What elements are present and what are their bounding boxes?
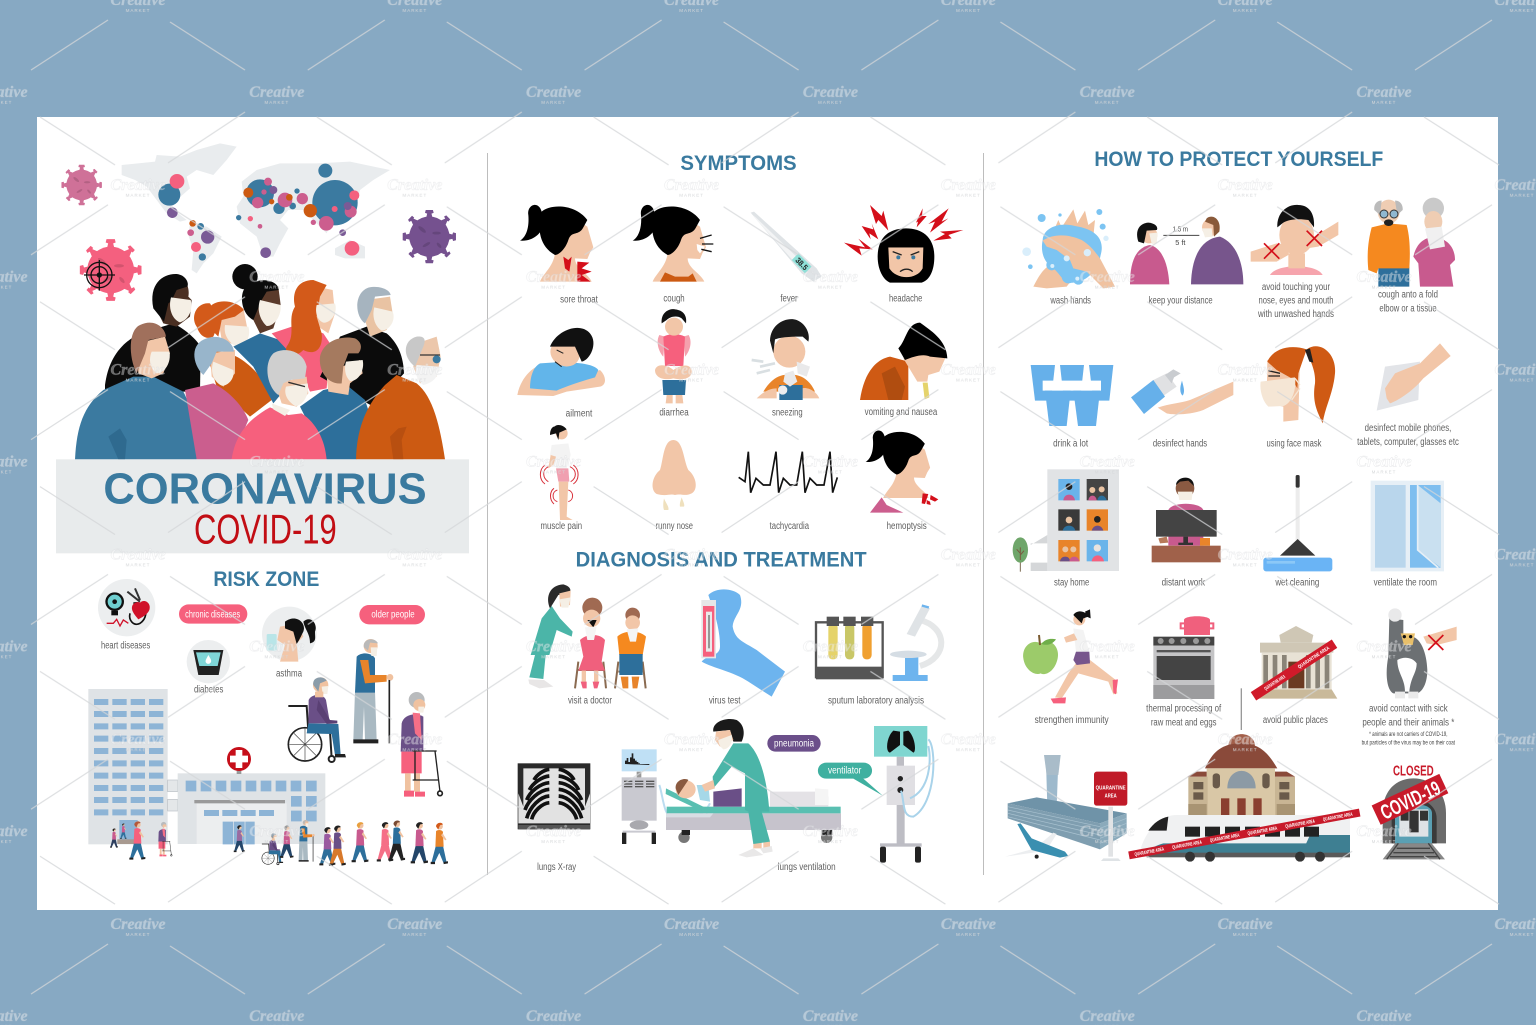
item: sputum laboratory analysis: sputum laboratory analysis [828, 695, 924, 706]
person: woman with long red hair [272, 280, 336, 392]
icon: diabetes [187, 640, 230, 695]
pill: chronic diseases [179, 604, 247, 624]
item: keep your distance: keep your distance [1149, 295, 1213, 306]
panel: how to protect yourself [1022, 146, 1459, 450]
small crowd of walking people [110, 820, 448, 866]
icon: asthma: asthma [276, 669, 302, 680]
tall hospital building [88, 689, 178, 844]
icon: pink virus [61, 165, 102, 205]
heading: how to protect yourself: HOW TO PROTECT YOURSELF [1094, 146, 1383, 171]
person: blue shirt woman with bob [300, 337, 368, 459]
item: wet cleaning: wet cleaning [1275, 577, 1319, 588]
symptom: ailment [517, 328, 605, 419]
item: disinfect phones: desinfect mobile phones, [1365, 423, 1451, 434]
item: avoid sick animals: * animals are not carriers of COVID-19, [1369, 732, 1448, 738]
title band [56, 459, 469, 553]
symptom: muscle pain [540, 425, 582, 532]
pill: older people: older people [371, 609, 415, 620]
symptom: hemoptysis [866, 430, 938, 532]
item: using face mask [1260, 346, 1335, 450]
symptom: cough: cough [663, 294, 685, 305]
item: avoid public places [1251, 626, 1337, 726]
item: avoid sick animals: people and their animals * [1362, 717, 1454, 728]
item: thermal processing: thermal processing of [1146, 704, 1221, 715]
illustration: closed train station: QUARANTINE AREA [1323, 812, 1353, 823]
item: ventilate the room [1371, 481, 1444, 588]
item: avoid touching face [1251, 205, 1338, 320]
symptom: fever thermometer: fever [780, 293, 798, 304]
symptom: sneezing: sneezing [772, 408, 803, 419]
pill: pneumonia: pneumonia [774, 738, 814, 749]
illustration: closed train station: QUARANTINE AREA [1134, 847, 1165, 858]
icon: red virus with target [80, 239, 141, 301]
symptom: headache: headache [889, 293, 923, 304]
person: man in blue sweater [75, 323, 197, 459]
person: woman with hair bun [232, 264, 291, 403]
symptom: runny nose: runny nose [656, 521, 693, 532]
symptom: fever thermometer: 38.5 [793, 256, 810, 272]
person: old man in orange [356, 337, 445, 459]
symptom: hemoptysis: hemoptysis [887, 521, 927, 532]
symptom: cough [633, 205, 713, 305]
illustration: airport in quarantine: QUARANTINE [1096, 785, 1126, 791]
item: keep your distance: 1.5 m [1173, 225, 1188, 234]
item: avoid public places: QUARANTINE AREA [1263, 674, 1287, 692]
icon: red cross sign [227, 747, 251, 774]
item: wet cleaning [1263, 475, 1332, 588]
item: drink a lot [1031, 365, 1113, 450]
figure: person in wheelchair [288, 677, 346, 762]
item: desinfect hands [1131, 369, 1233, 450]
symptom: diarrhea: diarrhea [659, 407, 689, 418]
icon: heart diseases [98, 579, 155, 651]
item: lungs ventilation [622, 719, 841, 873]
callout: ventilator: ventilator [828, 765, 862, 776]
symptom: ailment: ailment [566, 408, 593, 419]
item: sputum laboratory analysis [816, 604, 941, 706]
illustration: airport in quarantine [1005, 755, 1127, 861]
item: distant work: distant work [1162, 577, 1205, 588]
heading: diagnosis and treatment: DIAGNOSIS AND TREATMENT [576, 547, 867, 572]
icon: asthma [262, 607, 317, 680]
illustration: airport in quarantine: AREA [1105, 793, 1117, 799]
title: coronavirus: CORONAVIRUS [103, 465, 427, 514]
item: avoid public places: QUARANTINE AREA [1297, 645, 1331, 670]
heading: risk zone: RISK ZONE [213, 566, 319, 591]
item: cough into elbow: cough anto a fold [1378, 290, 1438, 301]
item: wash hands [1022, 209, 1115, 306]
item: desinfect hands: desinfect hands [1153, 439, 1207, 450]
item: wash hands: wash hands [1050, 295, 1091, 306]
person: woman with orange ponytail [194, 301, 272, 417]
symptom: sore throat [520, 205, 598, 306]
callout: ventilator [818, 763, 883, 796]
illustration: closed train station: QUARANTINE AREA [1209, 833, 1240, 844]
panel: white sheet [37, 117, 1498, 910]
item: avoid sick animals: avoid contact with sick [1369, 704, 1448, 715]
panel: how to protect yourself, lower rows [1005, 469, 1457, 862]
item: virus test: virus test [709, 695, 741, 706]
world map with case bubbles [122, 143, 390, 273]
item: visit a doctor [528, 584, 646, 706]
item: avoid touching face: with unwashed hands [1257, 309, 1334, 320]
item: strengthen immunity [1023, 609, 1118, 726]
icon: purple virus [403, 210, 456, 263]
pill: chronic diseases: chronic diseases [185, 609, 240, 620]
item: ventilate the room: ventilate the room [1374, 577, 1437, 588]
pill: older people [359, 605, 425, 624]
item: stay home: stay home [1054, 577, 1090, 588]
item: thermal processing: raw meat and eggs [1151, 717, 1216, 728]
item: lungs x-ray [518, 763, 590, 873]
symptom: tachycardia: tachycardia [770, 521, 809, 532]
figure: old woman with walker [401, 692, 442, 797]
item: avoid touching face: avoid touching your [1262, 282, 1331, 293]
symptom: tachycardia [739, 452, 837, 532]
figure: old man with cane [353, 639, 393, 743]
panel: symptoms [517, 150, 963, 532]
item: keep your distance [1130, 217, 1243, 306]
item: avoid sick animals: but particles of the virus may be on their coat [1362, 740, 1455, 746]
item: disinfect phones: tablets, computer, glasses etc [1357, 437, 1459, 448]
illustration: closed train station [1128, 688, 1360, 862]
heading: symptoms: SYMPTOMS [680, 150, 797, 175]
person: woman with blue-grey hair [185, 337, 248, 459]
item: lungs x-ray: lungs X-ray [537, 862, 576, 873]
item: thermal processing [1146, 616, 1221, 728]
item: visit a doctor: visit a doctor [568, 695, 613, 706]
panel: diagnosis and treatment [518, 547, 941, 873]
illustration: closed subway tunnel [1372, 763, 1449, 859]
icon: diabetes: diabetes [194, 684, 223, 695]
person: grey-haired man [320, 287, 404, 407]
symptom: muscle pain: muscle pain [540, 521, 582, 532]
illustration: closed train station: QUARANTINE AREA [1247, 826, 1278, 837]
panel: coronavirus hero [56, 143, 469, 553]
subtitle: covid-19: COVID-19 [194, 505, 337, 552]
symptom: vomiting and nausea [860, 323, 947, 418]
panel: risk zone [88, 566, 448, 866]
item: avoid public places: avoid public places [1263, 715, 1328, 726]
item: avoid sick animals [1362, 608, 1457, 746]
item: distant work [1152, 478, 1221, 588]
item: using face mask: using face mask [1266, 439, 1321, 450]
illustration: closed train station: QUARANTINE AREA [1285, 819, 1316, 830]
item: drink a lot: drink a lot [1053, 439, 1088, 450]
symptom: fever thermometer [751, 212, 822, 304]
illustration: closed subway tunnel: CLOSED [1393, 763, 1434, 779]
icon: heart diseases: heart diseases [101, 640, 150, 651]
item: stay home [1013, 469, 1119, 588]
symptom: sore throat: sore throat [560, 295, 598, 306]
symptom: sneezing [752, 319, 819, 419]
group of masked people [75, 264, 445, 459]
icon: ventilator machine [874, 726, 933, 863]
person: dark-skinned man [105, 274, 201, 392]
item: lungs ventilation: lungs ventilation [778, 862, 836, 873]
item: cough into elbow [1368, 198, 1455, 314]
pill: pneumonia [767, 735, 821, 752]
low hospital building [178, 773, 325, 844]
person: grandmother in pink [232, 350, 327, 459]
item: cough into elbow: elbow or a tissue [1379, 303, 1437, 314]
item: keep your distance: 5 ft [1175, 238, 1185, 247]
item: avoid touching face: nose, eyes and mouth [1258, 296, 1333, 307]
item: virus test [701, 589, 785, 706]
item: strengthen immunity: strengthen immunity [1035, 715, 1109, 726]
symptom: vomiting and nausea: vomiting and nausea [865, 407, 938, 418]
illustration: closed subway tunnel: COVID-19 [1377, 777, 1444, 824]
symptom: runny nose [653, 440, 696, 532]
illustration: closed train station: QUARANTINE AREA [1172, 840, 1203, 851]
symptom: diarrhea [655, 309, 692, 418]
item: disinfect phones [1357, 343, 1459, 448]
symptom: headache [844, 205, 963, 304]
